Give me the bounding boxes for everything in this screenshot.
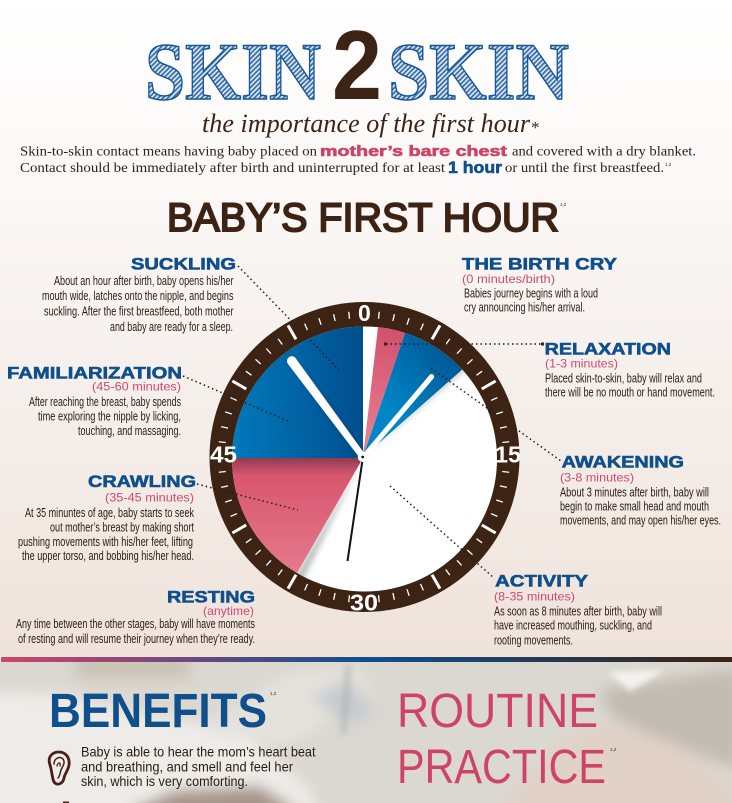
label: Awakening: (3-8 minutes) bbox=[560, 471, 634, 485]
label: Relaxation: (1-3 minutes) bbox=[545, 356, 618, 370]
label: The Birth Cry: (0 minutes/birth) bbox=[462, 272, 555, 286]
label: Suckling: mouth wide, latches onto the nipple, and begins bbox=[42, 288, 234, 303]
label: Crawling: out mother’s breast by making short bbox=[50, 520, 194, 535]
label: Suckling: About an hour after birth, baby opens his/her bbox=[54, 273, 234, 288]
label: Resting: RESTING bbox=[167, 588, 255, 607]
clock numerals: 45 bbox=[210, 442, 237, 468]
long hand bbox=[287, 356, 366, 459]
benefits superscript: 1,2 bbox=[270, 691, 277, 696]
label: Familiarization: After reaching the breast, baby spends bbox=[29, 394, 181, 409]
title: Skin 2 Skin bbox=[145, 10, 569, 120]
intro text: 1,2 bbox=[665, 162, 672, 167]
label: Resting: of resting and will resume their journey when they’re ready. bbox=[18, 631, 255, 646]
label: Crawling: CRAWLING bbox=[88, 472, 196, 491]
next benefit icon (cropped) bbox=[63, 802, 69, 803]
label: Activity: have increased mouthing, suckling, and bbox=[494, 617, 652, 632]
label: The Birth Cry: THE BIRTH CRY bbox=[462, 255, 618, 274]
benefit text: hearing: skin, which is very comforting. bbox=[81, 773, 248, 789]
intro text: 1 hour bbox=[448, 158, 502, 177]
label: Familiarization: (45-60 minutes) bbox=[92, 380, 181, 394]
pillow highlight bbox=[608, 670, 665, 691]
label: Resting: Any time between the other stages, baby will have moments bbox=[16, 616, 255, 631]
routine practice heading: ROUTINE bbox=[397, 685, 598, 738]
intro text bbox=[20, 143, 696, 177]
label: The Birth Cry: Babies journey begins with a loud bbox=[464, 286, 598, 301]
label: Crawling: (35-45 minutes) bbox=[105, 491, 194, 505]
label: The Birth Cry: cry announcing his/her arrival. bbox=[464, 300, 585, 315]
panel: routine practice bbox=[397, 685, 617, 794]
clock wedges bbox=[232, 326, 466, 578]
clock numerals: 30 bbox=[350, 590, 378, 616]
benefit text: hearing: Baby is able to hear the mom’s heart beat bbox=[81, 744, 316, 760]
hub bbox=[358, 452, 368, 462]
clock ring bbox=[210, 302, 520, 612]
clock numerals: 15 bbox=[495, 442, 521, 468]
benefit text: hearing bbox=[81, 744, 316, 789]
label: Crawling: pushing movements with his/her feet, lifting bbox=[18, 534, 193, 549]
label: Activity bbox=[494, 572, 662, 647]
intro text: Skin-to-skin contact means having baby placed on bbox=[20, 144, 317, 158]
dotted leader lines bbox=[183, 266, 561, 578]
clock face bbox=[232, 326, 497, 592]
label: Activity: ACTIVITY bbox=[495, 572, 589, 591]
label: Crawling bbox=[18, 472, 196, 563]
gradient divider bar bbox=[1, 657, 732, 662]
short hand bbox=[362, 374, 434, 459]
label: Crawling: At 35 minuntes of age, baby starts to seek bbox=[25, 505, 194, 520]
hand shadow bbox=[293, 362, 367, 459]
label: Suckling: SUCKLING bbox=[131, 254, 236, 274]
clock numerals bbox=[210, 300, 521, 616]
title: Skin 2 Skin: 2 bbox=[332, 10, 382, 120]
routine practice superscript: 1,2 bbox=[610, 747, 617, 752]
hub pin bbox=[361, 456, 364, 458]
subtitle: the importance of the first hour bbox=[202, 109, 531, 138]
benefit text: hearing: and breathing, and smell and feel her bbox=[81, 758, 293, 774]
label: Resting: (anytime) bbox=[203, 604, 254, 618]
intro text: or until the first breastfeed. bbox=[505, 160, 664, 175]
label: Crawling: the upper torso, and bobbing his/her head. bbox=[22, 548, 194, 563]
background photo (blurred) bbox=[0, 655, 732, 803]
title: Skin 2 Skin: SKIN bbox=[388, 26, 569, 117]
intro text: Contact should be immediately after birth and uninterrupted for at least bbox=[20, 160, 445, 175]
heading: Baby's First Hour: BABY’S FIRST HOUR bbox=[167, 196, 559, 240]
label: Awakening: AWAKENING bbox=[562, 452, 684, 471]
label: Activity: rooting movements. bbox=[494, 632, 573, 647]
label: Suckling: and baby are ready for a sleep. bbox=[110, 319, 233, 334]
minute ticks bbox=[219, 312, 509, 602]
label: Activity: As soon as 8 minutes after birth, baby will bbox=[494, 604, 662, 619]
routine practice heading bbox=[397, 685, 606, 794]
clock numerals: 0 bbox=[358, 300, 371, 326]
heading: Baby's First Hour: 1,2 bbox=[560, 202, 567, 207]
benefits heading: BENEFITS bbox=[49, 685, 267, 738]
second hand bbox=[348, 460, 362, 561]
label: Resting bbox=[16, 588, 255, 646]
panel: benefits bbox=[49, 685, 316, 803]
label: Suckling: suckling. After the first breastfeed, both mother bbox=[44, 304, 234, 318]
title: Skin 2 Skin: SKIN bbox=[145, 26, 321, 117]
clock bbox=[210, 302, 520, 612]
bed rail detail bbox=[340, 665, 352, 735]
label: The Birth Cry bbox=[462, 255, 618, 315]
intro text: mother’s bare chest bbox=[320, 143, 507, 160]
icon: ear bbox=[49, 752, 69, 784]
subtitle asterisk: * bbox=[531, 118, 540, 137]
intro text: and covered with a dry blanket. bbox=[512, 144, 696, 158]
label: Familiarization bbox=[7, 364, 182, 438]
label: Suckling bbox=[42, 254, 236, 334]
label: Relaxation bbox=[545, 339, 715, 400]
label: Awakening bbox=[560, 452, 721, 527]
label: Relaxation: RELAXATION bbox=[545, 339, 671, 358]
label: Familiarization: time exploring the nipple by licking, bbox=[38, 408, 181, 424]
label: Familiarization: FAMILIARIZATION bbox=[7, 364, 182, 383]
clock hands bbox=[287, 356, 434, 561]
label: Activity: (8-35 minutes) bbox=[494, 590, 575, 604]
routine practice heading: PRACTICE bbox=[397, 741, 606, 794]
label: Familiarization: touching, and massaging. bbox=[78, 423, 181, 438]
